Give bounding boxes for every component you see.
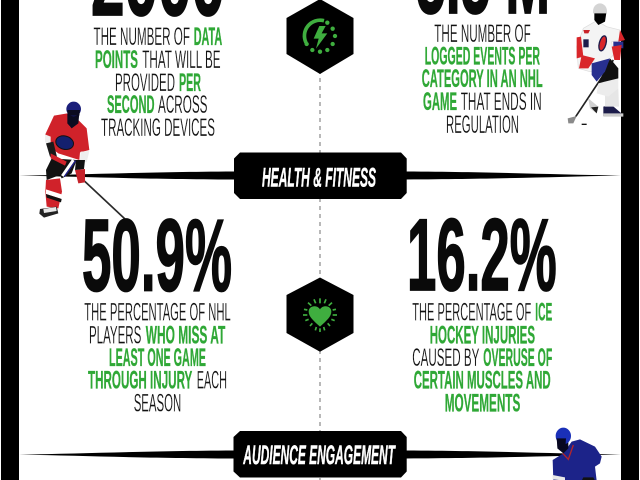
text: THE PERCENTAGE OF NHL — [84, 299, 231, 327]
description: players missing games: PLAYERS — [89, 321, 141, 349]
description: players missing games: SEASON — [134, 389, 181, 417]
text: THAT WILL BE — [142, 46, 221, 74]
player: blue jersey skater — [553, 428, 602, 480]
stat: 16.2 percent: ICE — [535, 299, 552, 327]
stat: 16.2 percent — [407, 198, 557, 417]
stat: 2000 data points: TRACKING DEVICES — [101, 114, 215, 142]
description: players missing games — [84, 299, 231, 417]
description: players missing games: THROUGH INJURY — [88, 367, 192, 395]
description: data points: THE NUMBER OF — [94, 23, 190, 51]
description: data points: SECOND — [107, 91, 154, 119]
description: data points: PER — [179, 69, 201, 97]
description: data points — [94, 23, 222, 142]
description: logged events — [422, 20, 543, 139]
divider spike left: health — [19, 172, 234, 180]
description: data points: PROVIDED — [115, 69, 175, 97]
description: data points: POINTS — [95, 46, 138, 74]
icon: heart hexagon — [286, 278, 354, 352]
section label: audience engagement — [234, 431, 407, 478]
stat: 50.9 percent: EACH — [197, 367, 227, 395]
description: overuse injuries: MOVEMENTS — [445, 389, 520, 417]
player: red skater figure — [39, 102, 125, 219]
description: data points: ACROSS — [158, 91, 208, 119]
divider spike right: audience — [406, 450, 621, 458]
icon: energy hexagon — [286, 0, 354, 74]
number: 50.9%: 50.9% — [82, 198, 232, 312]
divider spike left: audience — [19, 450, 234, 458]
stat: logged events: THAT ENDS IN — [461, 88, 542, 116]
text: AUDIENCE ENGAGEMENT — [243, 440, 396, 470]
description: logged events: GAME — [423, 88, 457, 116]
section label: health and fitness: HEALTH & FITNESS — [262, 162, 376, 192]
right border bar — [621, 0, 639, 480]
divider spike right: health — [406, 172, 621, 180]
description: overuse injuries — [412, 299, 552, 417]
left border bar — [1, 0, 19, 480]
section label: health and fitness — [234, 152, 407, 199]
text: DATA — [194, 23, 222, 51]
stat: logged events — [416, 0, 550, 139]
player: white jersey skater — [568, 3, 625, 125]
description: logged events: REGULATION — [446, 111, 519, 139]
description: logged events: THE NUMBER OF — [434, 20, 531, 48]
stat: 50.9 percent — [82, 198, 232, 417]
description: players missing games: WHO MISS AT — [146, 321, 225, 349]
description: players missing games: LEAST ONE GAME — [109, 344, 206, 372]
stat: 2000 data points — [91, 0, 225, 142]
description: overuse injuries: CAUSED BY — [412, 344, 479, 372]
